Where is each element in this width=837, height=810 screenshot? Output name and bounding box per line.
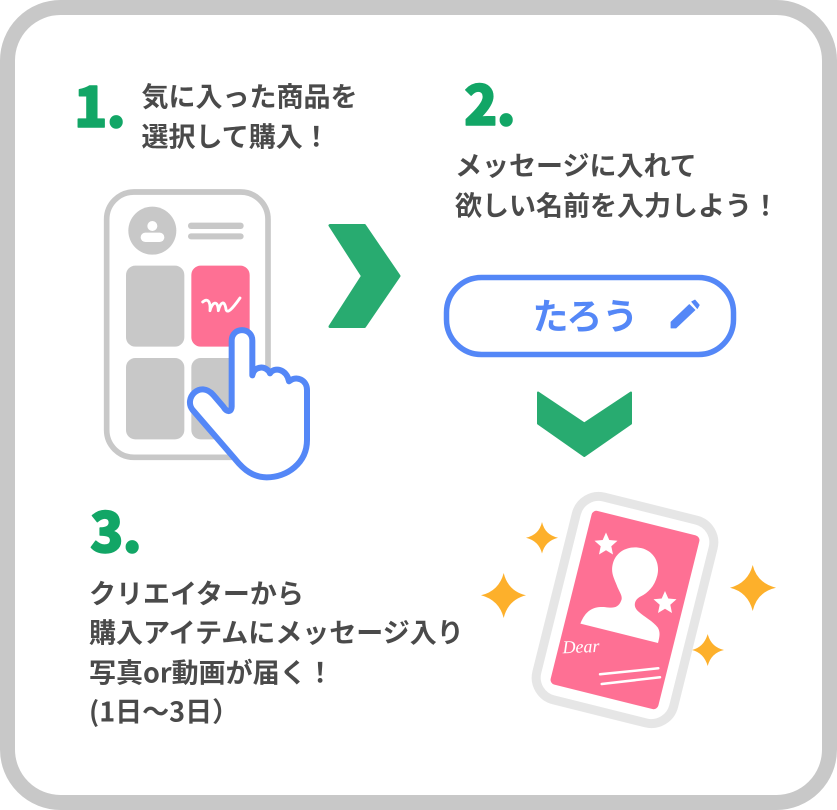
step 1 text [142,76,358,154]
step 2 text: メッセージに入れて [455,144,697,184]
name text: たろう [532,288,638,340]
card face [549,510,701,710]
product tile [191,358,250,439]
step 2 number: 2. [464,61,515,141]
Dear text: Dear [561,636,601,657]
arrow: right chevron [330,226,399,326]
product tile [126,358,184,439]
person silhouette [580,538,679,643]
step 1 number: 1. [74,63,125,143]
star [654,591,676,613]
highlighted product tile [191,266,250,347]
step 3 text: (1日～3日） [89,690,239,730]
step 3 text [89,572,464,730]
step 2 text: 欲しい名前を入力しよう！ [455,184,779,224]
step 1 text: 選択して購入！ [142,116,330,154]
avatar [128,207,176,255]
card frame [531,492,719,728]
product tile [126,266,184,347]
hand [190,330,307,477]
sparkle [692,634,724,666]
message lines [600,668,660,684]
profile lines [188,223,244,239]
step 3 number: 3. [90,488,141,568]
sparkle [526,522,558,554]
step 3 text: 購入アイテムにメッセージ入り [89,612,464,650]
step 3 text: クリエイターから [89,572,304,612]
sparkle [730,565,776,611]
photo card [531,492,719,728]
step 3 text: 写真or動画が届く！ [89,652,334,690]
arrow: down chevron [538,392,631,456]
step 2 text [455,144,779,224]
sparkle [481,573,526,618]
name input pill [446,278,734,354]
phone outline [107,192,268,457]
step 1 text: 気に入った商品を [142,76,358,114]
icon: pencil [671,300,699,328]
star [594,532,618,554]
icon: phone with tapping hand [107,192,307,477]
